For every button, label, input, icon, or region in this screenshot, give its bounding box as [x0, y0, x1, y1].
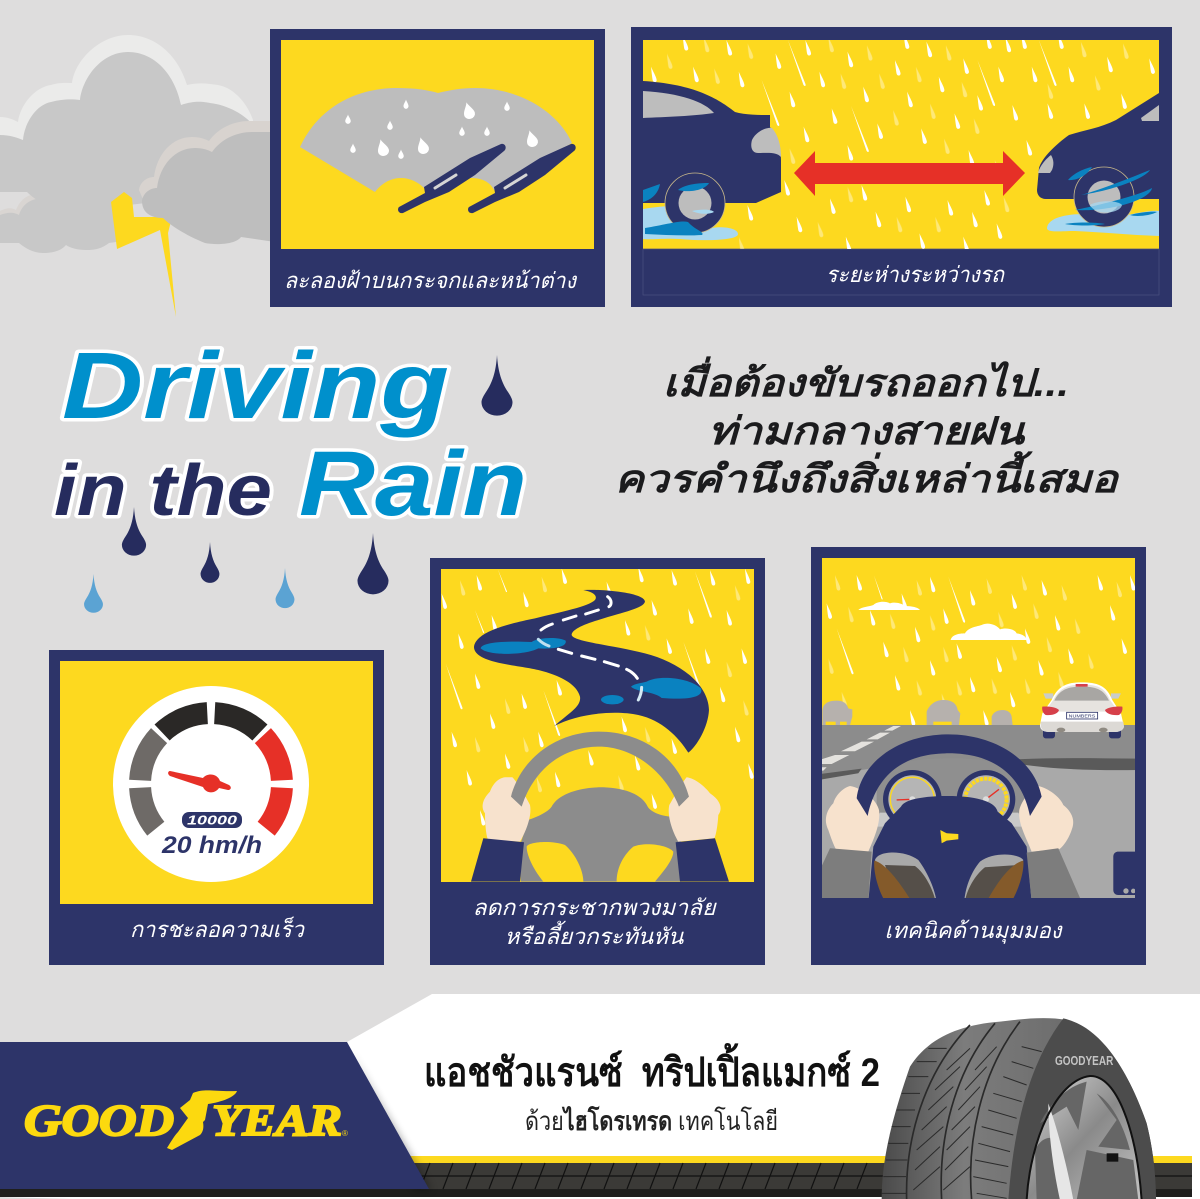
odometer: 10000	[187, 812, 238, 828]
white banner	[0, 994, 1200, 1199]
steering wheel rim	[511, 732, 689, 807]
wiper blades	[398, 144, 576, 213]
small back cloud	[0, 194, 130, 253]
illustration: driver's view	[818, 575, 1138, 902]
tyre image	[882, 1018, 1156, 1199]
tread	[882, 1018, 1156, 1199]
hands	[483, 777, 721, 842]
rain	[827, 575, 1135, 726]
steering wheel rim	[857, 734, 1042, 816]
caption: หรือลี้ยวกระทันหัน	[504, 920, 684, 949]
icon: rain drops	[84, 355, 513, 613]
icon: speedometer	[113, 686, 309, 882]
sleeves	[471, 838, 729, 882]
car: front right	[1037, 93, 1159, 236]
heading: Thai tagline: ควรคำนึงถึงสิ่งเหล่านี้เสมอ	[614, 451, 1120, 501]
panel: wipers	[270, 29, 605, 307]
instrument cluster	[876, 763, 1024, 826]
icon: winged foot	[167, 1090, 237, 1150]
illustration: winding road and steering wheel	[442, 567, 754, 882]
sleeves	[818, 848, 1082, 902]
distant cars	[822, 700, 1013, 725]
logo: Goodyear: GOOD	[24, 1096, 174, 1145]
rain	[442, 567, 754, 826]
rim	[1027, 1076, 1142, 1199]
panel: vision	[811, 547, 1146, 965]
footer banner	[0, 994, 1200, 1199]
car: rear left	[643, 81, 781, 240]
sidewall	[1008, 1018, 1156, 1199]
speed readout: 20 hm/h	[161, 832, 262, 859]
hands	[826, 786, 1073, 852]
title: Driving in the Rain: in the	[54, 451, 272, 531]
steering wheel hub	[868, 796, 1032, 902]
caption: ลดการกระชากพวงมาลัย	[472, 895, 718, 920]
title: Driving in the Rain: Rain	[299, 433, 527, 535]
dashboard	[818, 758, 1138, 902]
caption: เทคนิคด้านมุมมอง	[884, 918, 1064, 944]
storm clouds and lightning	[0, 35, 275, 317]
sidewall lettering: GOODYEAR	[1055, 1053, 1114, 1068]
navy logo block	[0, 1042, 432, 1190]
needle	[168, 771, 231, 792]
rain	[651, 33, 1155, 252]
product tagline: ด้วยไฮโดรเทรด เทคโนโลยี	[525, 1105, 778, 1136]
lightning bolt	[111, 192, 176, 317]
odometer	[182, 812, 242, 828]
title: Driving in the Rain	[54, 333, 527, 535]
heading: Thai tagline: เมื่อต้องขับรถออกไป...	[663, 356, 1069, 405]
white car: NUMBERS	[1069, 714, 1095, 719]
winding road	[474, 590, 709, 753]
grooves	[907, 1022, 1020, 1199]
heading: Thai tagline	[614, 356, 1120, 501]
steering wheel hub	[521, 787, 682, 882]
caption	[472, 895, 718, 949]
clouds	[858, 602, 1027, 640]
arrow: double-headed red	[794, 151, 1025, 196]
caption: ละลองฝ้าบนกระจกและหน้าต่าง	[284, 268, 578, 293]
logo: Goodyear	[24, 1090, 348, 1150]
product name: แอชชัวแรนซ์ ทริปเปิ้ลแมกซ์ 2	[424, 1043, 880, 1095]
front cloud	[139, 121, 275, 244]
caption: ระยะห่างระหว่างรถ	[826, 262, 1006, 287]
road	[822, 725, 1138, 775]
tread stripe	[0, 1156, 1192, 1197]
main cloud	[0, 35, 253, 213]
panel: slow down	[49, 650, 384, 965]
caption: การชะลอความเร็ว	[130, 916, 306, 942]
heading: Thai tagline: ท่ามกลางสายฝน	[708, 411, 1026, 453]
white car	[1040, 682, 1124, 738]
title: Driving in the Rain: Driving	[62, 333, 449, 439]
icon: horn	[940, 830, 958, 843]
panel: steering	[430, 558, 765, 965]
panel: following distance	[631, 27, 1172, 307]
logo: Goodyear: YEAR	[212, 1096, 342, 1145]
icon: windscreen with wipers	[300, 88, 576, 213]
logo: Goodyear: ®	[342, 1129, 348, 1138]
